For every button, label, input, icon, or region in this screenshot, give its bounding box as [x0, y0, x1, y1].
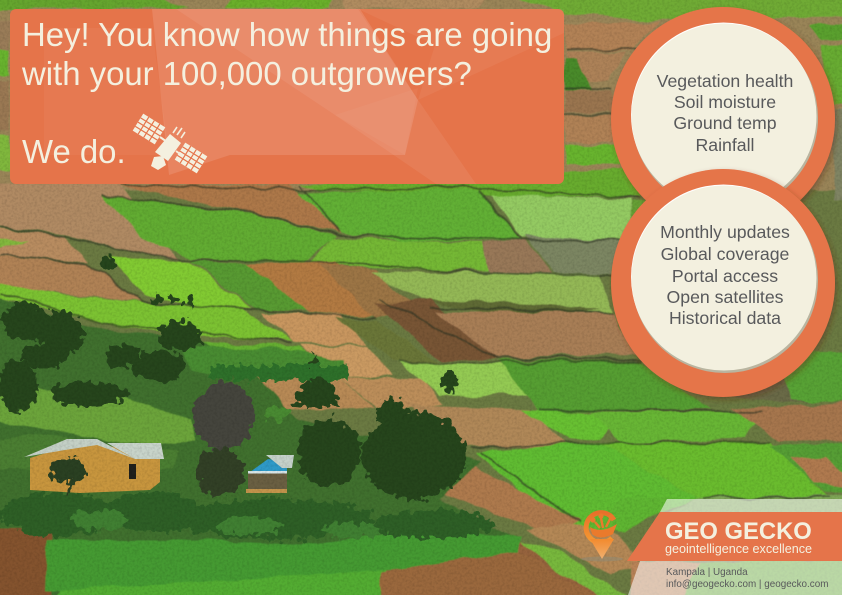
- data types list: Rainfall: [696, 135, 754, 155]
- service features list: Historical data: [669, 308, 781, 328]
- tree canopies: [0, 254, 494, 539]
- banner: Geo Gecko: [627, 512, 842, 561]
- blue shed: [246, 455, 294, 493]
- terrace divider lines: [0, 48, 830, 522]
- header facets: [44, 9, 564, 184]
- data types list: [657, 71, 793, 155]
- panel: service features circle: [611, 169, 835, 397]
- mid terraces: [0, 183, 178, 260]
- brand name: GEO GECKO: [665, 518, 812, 545]
- contact details: info@geogecko.com | geogecko.com: [666, 579, 828, 590]
- header box: [10, 9, 564, 184]
- contact details: Kampala | Uganda: [666, 567, 748, 578]
- header box: with your 100,000 outgrowers?: [21, 55, 472, 92]
- translucent footer panel: [628, 499, 842, 595]
- yellow farmhouse: [24, 439, 164, 493]
- data types list: Soil moisture: [674, 92, 776, 112]
- tree in front of farmhouse: [50, 457, 86, 494]
- tagline: geointelligence excellence: [665, 542, 812, 556]
- panel: data types circle: [611, 7, 835, 231]
- service features list: Portal access: [672, 266, 778, 286]
- header box: We do.: [22, 133, 126, 170]
- data types list: Vegetation health: [657, 71, 793, 91]
- icon: satellite: [133, 114, 207, 173]
- service features list: [660, 222, 790, 328]
- headline text: Hey! You know how things are going: [22, 16, 552, 53]
- service features list: Global coverage: [661, 244, 790, 264]
- service features list: Monthly updates: [660, 222, 790, 242]
- icon: gecko location pin: [581, 513, 623, 562]
- data types list: Ground temp: [673, 113, 777, 133]
- top terraces behind the header: [0, 0, 842, 190]
- lower slope and village: [0, 295, 520, 595]
- service features list: Open satellites: [666, 287, 784, 307]
- contact details: [666, 567, 828, 590]
